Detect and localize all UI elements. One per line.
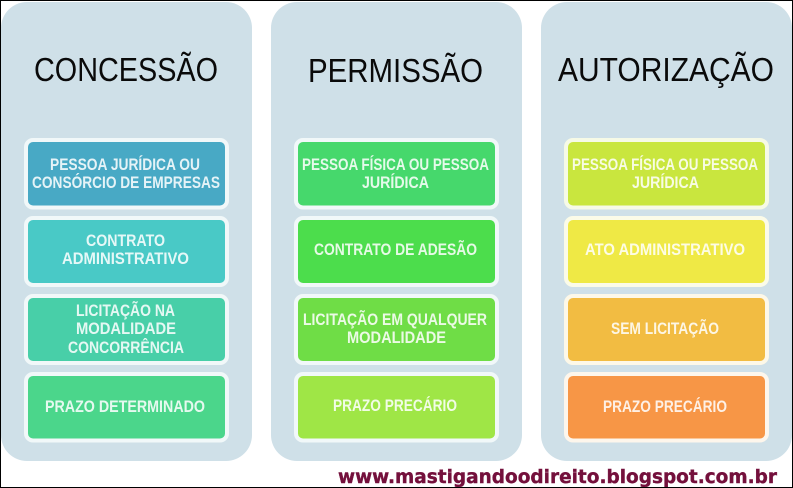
box: licitação em qualquer modalidade: MODALIDADE bbox=[347, 329, 446, 347]
panel: autorização bbox=[541, 2, 792, 461]
box: licitação em qualquer modalidade bbox=[296, 296, 497, 363]
box: licitação concorrência: MODALIDADE bbox=[76, 320, 176, 338]
heading: autorização: AUTORIZAÇÃO bbox=[558, 51, 774, 88]
website url: www.mastigandoodireito.blogspot.com.br bbox=[338, 466, 778, 488]
box: prazo determinado: PRAZO DETERMINADO bbox=[45, 398, 205, 416]
box: prazo precário: PRAZO PRECÁRIO bbox=[333, 396, 457, 415]
panel: concessão bbox=[1, 2, 252, 461]
box: licitação em qualquer modalidade: LICITAÇÃO EM QUALQUER bbox=[303, 309, 487, 329]
box: pessoa física ou jurídica bbox=[566, 140, 767, 208]
box: pessoa física ou jurídica: JURÍDICA bbox=[632, 173, 699, 192]
box: prazo precário bbox=[296, 374, 497, 440]
box: pessoa física ou jurídica: PESSOA FÍSICA OU PESSOA bbox=[302, 155, 489, 174]
box: contrato de adesão bbox=[296, 218, 497, 285]
heading: concessão: CONCESSÃO bbox=[34, 51, 218, 88]
box: contrato de adesão: CONTRATO DE ADESÃO bbox=[314, 239, 477, 259]
box: prazo precário: PRAZO PRECÁRIO bbox=[603, 397, 727, 416]
box: pessoa jurídica ou consórcio: CONSÓRCIO DE EMPRESAS bbox=[32, 173, 220, 192]
box: pessoa física ou jurídica: JURÍDICA bbox=[362, 173, 429, 192]
heading: permissão: PERMISSÃO bbox=[308, 52, 483, 89]
box: pessoa jurídica ou consórcio: PESSOA JURÍDICA OU bbox=[50, 155, 200, 174]
box: ato administrativo: ATO ADMINISTRATIVO bbox=[585, 241, 745, 259]
box: licitação concorrência: LICITAÇÃO NA bbox=[76, 300, 175, 320]
box: licitação concorrência bbox=[26, 296, 227, 363]
box: sem licitação bbox=[566, 296, 767, 363]
box: contrato administrativo bbox=[26, 218, 227, 285]
box: licitação concorrência: CONCORRÊNCIA bbox=[68, 338, 184, 357]
box: pessoa jurídica ou consórcio bbox=[26, 140, 227, 208]
box: sem licitação: SEM LICITAÇÃO bbox=[611, 318, 719, 338]
box: ato administrativo bbox=[566, 218, 767, 285]
box: contrato administrativo: CONTRATO bbox=[86, 232, 165, 250]
box: pessoa física ou jurídica bbox=[296, 140, 497, 208]
panel: permissão bbox=[271, 2, 522, 461]
box: contrato administrativo: ADMINISTRATIVO bbox=[62, 250, 189, 268]
box: prazo determinado bbox=[26, 374, 227, 440]
box: prazo precário bbox=[566, 374, 767, 440]
